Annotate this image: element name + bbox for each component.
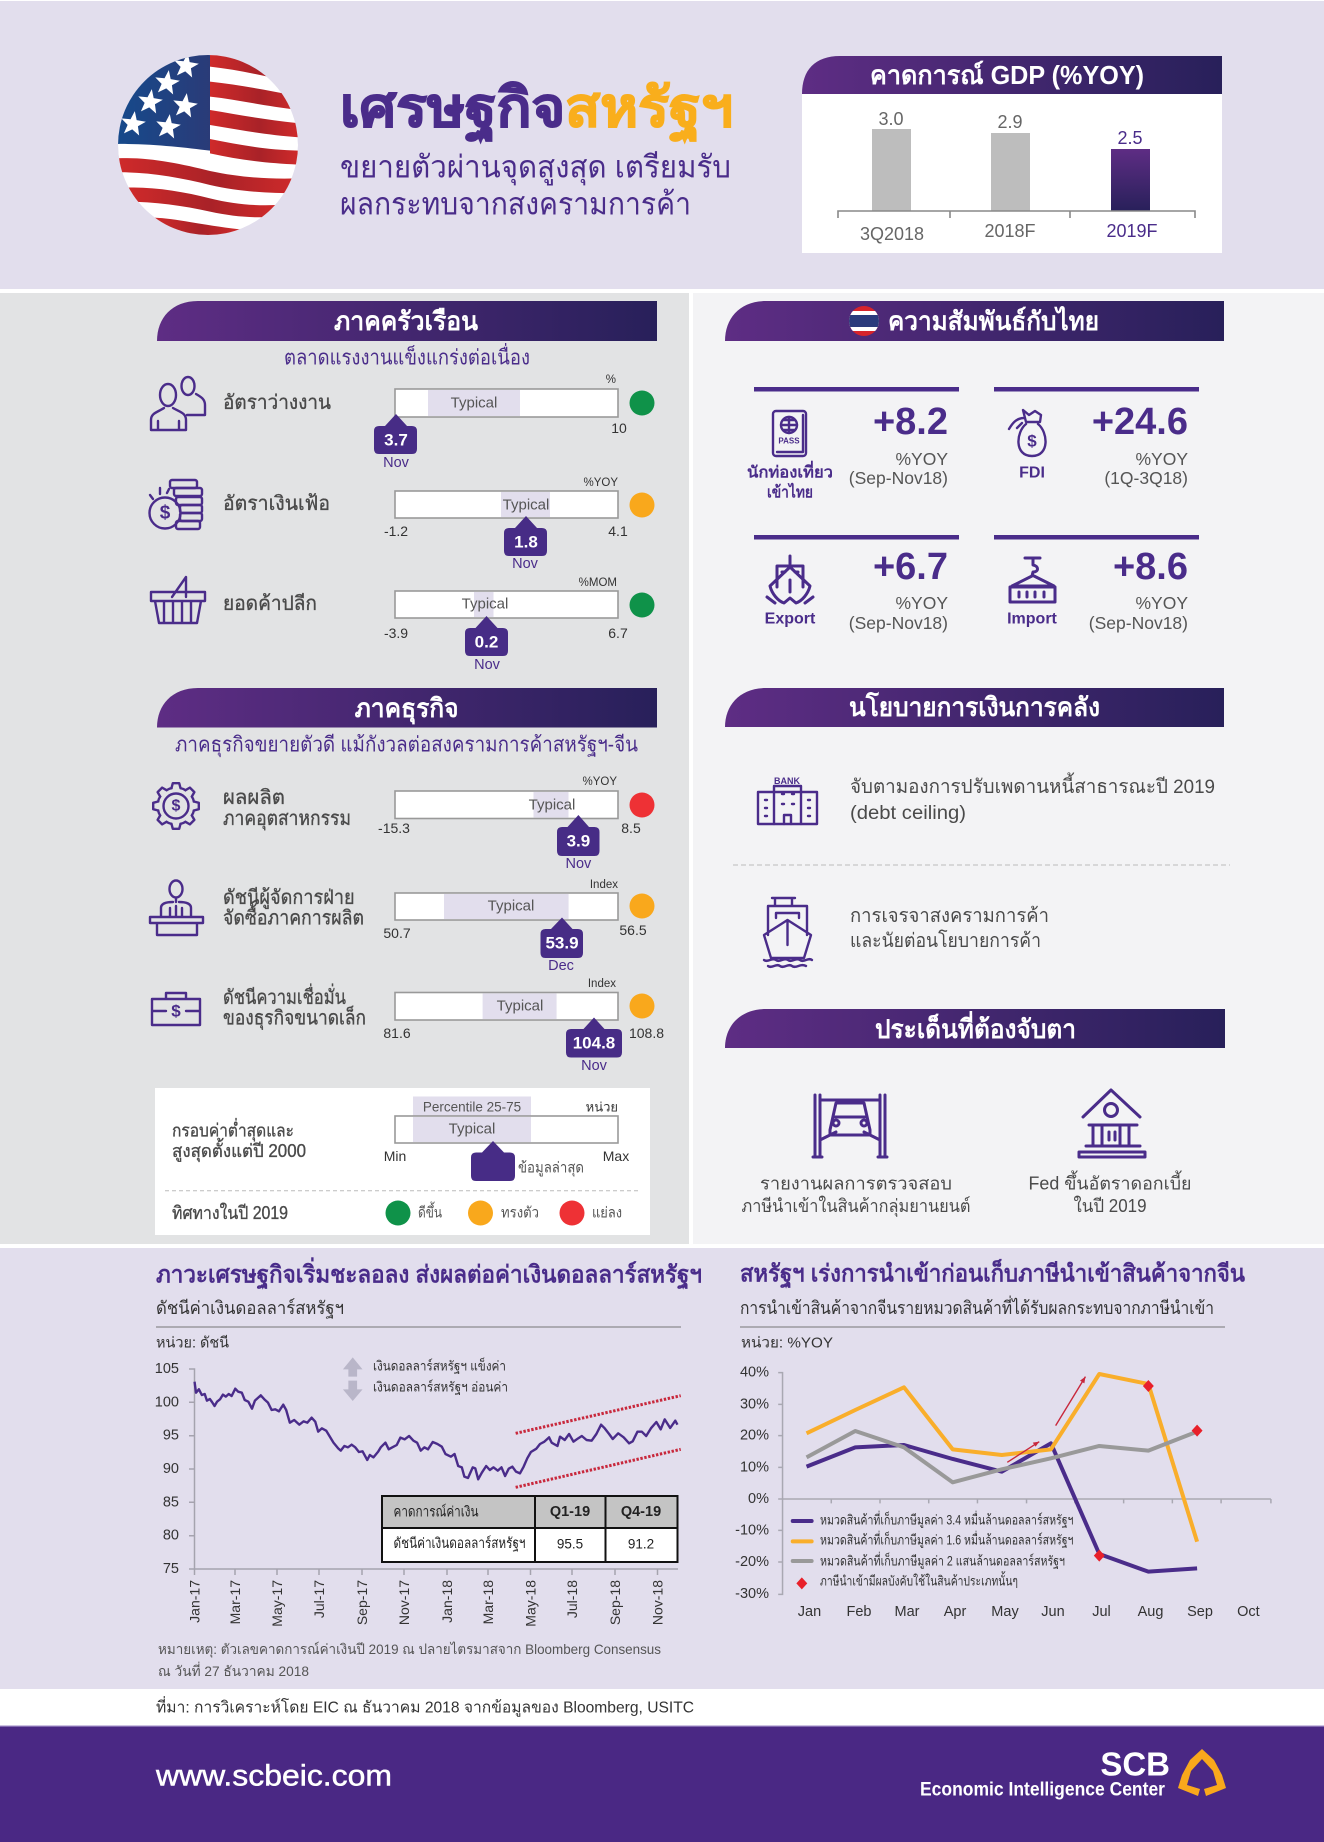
label: industrial production: ภาคอุตสาหกรรม — [223, 808, 351, 831]
icon text: briefcase dollar: $ — [171, 1002, 181, 1020]
table: currency forecast — [382, 1496, 678, 1562]
subtitle: ขยายตัวผ่านจุดสูงสุด เตรียมรับ — [340, 150, 731, 186]
line chart: dollar index: 95 — [163, 1428, 179, 1444]
line chart: dollar index: 100 — [155, 1394, 179, 1410]
bar chart: GDP: 2.9 — [997, 112, 1023, 132]
line chart: dollar index: May-17 — [269, 1580, 285, 1627]
table: currency forecast: Q4-19 — [621, 1504, 661, 1520]
line chart: dollar index: Nov-18 — [650, 1580, 666, 1625]
line chart: imports: Mar — [895, 1604, 920, 1620]
line chart: imports: หมวดสินค้าที่เก็บภาษีมูลค่า 1.6 หมื่นล้านดอลลาร์สหรัฐฯ — [820, 1530, 1074, 1548]
line chart: imports: หมวดสินค้าที่เก็บภาษีมูลค่า 2 แสนล้านดอลลาร์สหรัฐฯ — [820, 1552, 1065, 1570]
line chart: imports: 0% — [748, 1491, 769, 1507]
table: currency forecast: คาดการณ์ค่าเงิน — [394, 1504, 479, 1520]
line chart: dollar index: May-18 — [522, 1580, 538, 1627]
footer — [0, 1726, 1324, 1842]
line chart: imports — [735, 1327, 1271, 1620]
subtitle — [340, 150, 731, 222]
gauge: inflation: 4.1 — [608, 523, 628, 539]
icon: people — [151, 377, 205, 430]
line chart: imports: Aug — [1138, 1604, 1163, 1620]
gauge: PMI: 56.5 — [619, 922, 647, 938]
stat card: tourists — [747, 387, 959, 502]
stat card: FDI — [994, 387, 1199, 488]
item: trade war — [764, 898, 1049, 967]
logo: SCB: Economic Intelligence Center — [920, 1780, 1166, 1800]
gauge: PMI: 53.9 — [545, 934, 579, 952]
legend gauge: Percentile 25-75 — [423, 1100, 521, 1114]
line chart: dollar index: Jul-18 — [564, 1580, 580, 1618]
stat card: import: +8.6 — [1113, 546, 1188, 588]
legend gauge: Max — [603, 1148, 629, 1164]
gauge: retail: Nov — [474, 657, 501, 673]
icon: gear — [153, 783, 199, 829]
gauge: PMI — [383, 879, 654, 974]
line chart: dollar index: Mar-17 — [227, 1580, 243, 1624]
stat card: FDI: (1Q-3Q18) — [1104, 468, 1188, 488]
gauge: small business confidence: 104.8 — [573, 1034, 615, 1052]
stat card: export: %YOY — [895, 593, 948, 613]
gauge: small business confidence: 108.8 — [629, 1025, 664, 1041]
line chart: dollar index: Sep-17 — [354, 1580, 370, 1625]
chart title: dollar index: ภาวะเศรษฐกิจเริ่มชะลอลง ส่งผลต่อค่าเงินดอลลาร์สหรัฐฯ — [156, 1256, 702, 1290]
gauge: unemployment: % — [606, 374, 616, 386]
subheading: household: ตลาดแรงงานแข็งแกร่งต่อเนื่อง — [284, 342, 530, 370]
gauge: small business confidence: Nov — [581, 1058, 608, 1074]
gauge: retail: -3.9 — [384, 625, 408, 641]
heading: household: ภาคครัวเรือน — [334, 306, 478, 336]
legend text: range — [172, 1118, 306, 1162]
item: debt ceiling: (debt ceiling) — [850, 802, 966, 824]
item: Fed rate — [1028, 1090, 1192, 1216]
stat card: FDI: %YOY — [1135, 449, 1188, 469]
gauge: inflation — [384, 477, 654, 572]
label: unemployment: อัตราว่างงาน — [223, 392, 331, 414]
icon: basket — [151, 577, 205, 623]
legend: stable — [468, 1200, 539, 1226]
item: Fed rate: Fed ขึ้นอัตราดอกเบี้ย — [1028, 1170, 1192, 1194]
heading: issues to watch: ประเด็นที่ต้องจับตา — [875, 1010, 1076, 1044]
table: currency forecast: 95.5 — [557, 1536, 583, 1552]
legend gauge: หน่วย — [586, 1100, 618, 1114]
gauge: industrial production: %YOY — [582, 776, 617, 788]
legend gauge: ข้อมูลล่าสุด — [518, 1160, 584, 1178]
legend: better: ดีขึ้น — [418, 1202, 442, 1222]
legend: stable: ทรงตัว — [501, 1204, 539, 1222]
label: inflation: อัตราเงินเฟ้อ — [223, 493, 330, 515]
title: เศรษฐกิจ สหรัฐฯ — [340, 78, 733, 143]
heading: business: ภาคธุรกิจ — [355, 693, 459, 725]
subtitle: ผลกระทบจากสงครามการค้า — [340, 186, 691, 222]
gauge: PMI: Dec — [548, 958, 574, 974]
heading: fiscal policy — [725, 688, 1224, 727]
line chart: imports: 10% — [740, 1459, 769, 1475]
line chart: dollar index: Sep-18 — [607, 1580, 623, 1625]
label: small business confidence — [223, 983, 366, 1030]
gauge: small business confidence — [383, 978, 664, 1074]
bar chart: GDP: 2.5 — [1117, 128, 1143, 148]
gauge: unemployment — [374, 374, 654, 471]
gauge: retail: %MOM — [579, 577, 617, 589]
stat card: export: (Sep-Nov18) — [849, 613, 948, 633]
stat card: import: %YOY — [1135, 593, 1188, 613]
gauge: industrial production: Typical — [529, 796, 575, 814]
gauge: industrial production: 8.5 — [621, 820, 641, 836]
legend text: direction: ทิศทางในปี 2019 — [172, 1202, 288, 1223]
line chart: imports: -30% — [735, 1586, 769, 1602]
icon: briefcase — [152, 993, 200, 1025]
note: หมายเหตุ: ตัวเลขคาดการณ์ค่าเงินปี 2019 ณ ปลายไตรมาสจาก Bloomberg Consensus — [158, 1641, 661, 1658]
line chart: imports: หมวดสินค้าที่เก็บภาษีมูลค่า 3.4 หมื่นล้านดอลลาร์สหรัฐฯ — [820, 1510, 1074, 1528]
heading: household — [157, 301, 657, 341]
line chart: imports: 40% — [740, 1365, 769, 1381]
line chart: imports: Sep — [1187, 1604, 1213, 1620]
heading: GDP forecast: คาดการณ์ GDP (%YOY) — [870, 60, 1144, 90]
website: www.scbeic.com — [155, 1760, 392, 1792]
line chart: dollar index: 105 — [155, 1361, 179, 1377]
stat card: FDI: $ — [1027, 432, 1037, 450]
stat card: export: +6.7 — [873, 546, 948, 588]
legend: worse: แย่ลง — [592, 1204, 622, 1222]
item: debt ceiling: BANK — [774, 776, 800, 786]
panel: Thailand links — [725, 301, 1224, 633]
line chart: dollar index: Nov-17 — [396, 1580, 412, 1625]
gauge: unemployment: Typical — [451, 394, 497, 412]
chart subtitle: dollar index: ดัชนีค่าเงินดอลลาร์สหรัฐฯ — [156, 1298, 344, 1319]
label: small business confidence: ดัชนีความเชื่อมั่น — [223, 983, 346, 1009]
gauge: inflation: -1.2 — [384, 523, 408, 539]
label: industrial production: ผลผลิต — [223, 787, 285, 809]
gauge: unemployment: Nov — [383, 455, 410, 471]
line chart: dollar index: 90 — [163, 1461, 179, 1477]
gauge: industrial production: 3.9 — [567, 832, 590, 850]
gauge: PMI: Index — [590, 879, 618, 891]
gauge: small business confidence: Index — [588, 978, 616, 990]
label: retail: ยอดค้าปลีก — [223, 593, 317, 615]
chart subtitle: imports: การนำเข้าสินค้าจากจีนรายหมวดสินค้าที่ได้รับผลกระทบจากภาษีนำเข้า — [740, 1295, 1214, 1318]
bar chart: GDP: 3.0 — [878, 109, 904, 129]
line chart: dollar index — [155, 1327, 681, 1627]
line chart: imports: Jul — [1092, 1604, 1111, 1620]
panel: GDP forecast — [802, 56, 1222, 253]
bar chart: GDP: 2019F — [1106, 221, 1158, 241]
item: debt ceiling: จับตามองการปรับเพดานหนี้สาธารณะปี 2019 — [850, 772, 1215, 798]
line chart: dollar index: 85 — [163, 1494, 179, 1510]
stat card: tourists: เข้าไทย — [767, 482, 813, 502]
icon text: dollar: $ — [160, 502, 171, 524]
stat card: tourists: (Sep-Nov18) — [849, 468, 948, 488]
line chart: imports: Jun — [1041, 1604, 1065, 1620]
chart title: imports: สหรัฐฯ เร่งการนำเข้าก่อนเก็บภาษีนำเข้าสินค้าจากจีน — [740, 1258, 1246, 1290]
line chart: imports: Oct — [1237, 1604, 1260, 1620]
gauge: retail: Typical — [462, 596, 508, 612]
legend gauge: Min — [384, 1148, 406, 1164]
unit: imports: หน่วย: %YOY — [741, 1334, 833, 1352]
chart panel: imports from China — [735, 1258, 1271, 1620]
heading: business — [157, 688, 657, 728]
stat card: tourists: PASS — [778, 436, 800, 446]
label: PMI: ดัชนีผู้จัดการฝ่าย — [223, 887, 355, 910]
panel: business sector — [150, 688, 664, 1074]
stat card: tourists: %YOY — [895, 449, 948, 469]
item: trade war: และนัยต่อนโยบายการค้า — [850, 929, 1041, 952]
line chart: dollar index: Mar-18 — [480, 1580, 496, 1624]
panel: legend — [155, 1088, 650, 1235]
legend gauge — [384, 1096, 629, 1181]
line chart: imports: -10% — [735, 1522, 769, 1538]
heading: GDP forecast — [802, 56, 1222, 94]
line chart: dollar index: Jan-18 — [439, 1580, 455, 1623]
panel: household sector — [150, 301, 657, 673]
label: PMI: จัดซื้อภาคการผลิต — [223, 904, 364, 930]
heading: Thailand links: ความสัมพันธ์กับไทย — [888, 305, 1099, 336]
line chart: dollar index: Jul-17 — [311, 1580, 327, 1618]
gauge: inflation: Nov — [512, 556, 539, 572]
gauge: inflation: 1.8 — [514, 532, 538, 552]
gauge: retail — [384, 577, 654, 673]
icon: podium speaker — [150, 880, 203, 935]
gauge: small business confidence: Typical — [497, 998, 543, 1014]
logo: SCB: SCB — [1100, 1746, 1170, 1782]
gauge: retail: 6.7 — [608, 625, 628, 641]
line chart: imports: 20% — [740, 1428, 769, 1444]
item: auto tariff: รายงานผลการตรวจสอบ — [760, 1174, 952, 1194]
bar chart: GDP: 2018F — [984, 221, 1036, 241]
panel: issues to watch — [725, 1009, 1225, 1217]
gauge: industrial production: -15.3 — [378, 820, 410, 836]
stat card: FDI: +24.6 — [1092, 401, 1188, 443]
stat card: FDI: FDI — [1019, 464, 1045, 482]
line chart: imports: Feb — [846, 1604, 872, 1620]
note — [158, 1641, 661, 1679]
logo: SCB — [920, 1746, 1226, 1800]
line chart: dollar index: 75 — [163, 1561, 179, 1577]
item: trade war: การเจรจาสงครามการค้า — [850, 905, 1049, 927]
stat card: tourists: +8.2 — [873, 401, 948, 443]
heading: Thailand links — [725, 301, 1224, 341]
subheading: business: ภาคธุรกิจขยายตัวดี แม้กังวลต่อสงครามการค้าสหรัฐฯ-จีน — [175, 734, 638, 758]
note: ณ วันที่ 27 ธันวาคม 2018 — [158, 1662, 309, 1679]
line chart: imports: ภาษีนำเข้ามีผลบังคับใช้ในสินค้าประเภทนั้นๆ — [820, 1570, 1018, 1588]
gauge: PMI: 50.7 — [383, 925, 411, 941]
gauge: retail: 0.2 — [475, 632, 498, 652]
line chart: dollar index: เงินดอลลาร์สหรัฐฯ อ่อนค่า — [373, 1378, 508, 1396]
bar chart: GDP — [838, 109, 1195, 244]
item: debt ceiling — [758, 772, 1215, 824]
label: PMI — [223, 887, 364, 930]
gauge: unemployment: 3.7 — [384, 430, 408, 450]
gauge: inflation: %YOY — [583, 477, 618, 489]
gauge: industrial production — [378, 776, 654, 872]
stat card: export: Export — [765, 610, 816, 628]
heading: fiscal policy: นโยบายการเงินการคลัง — [849, 691, 1100, 722]
legend text: range: กรอบค่าต่ำสุดและ — [172, 1118, 294, 1142]
stat card: import: (Sep-Nov18) — [1089, 613, 1188, 633]
line chart: imports: 30% — [740, 1396, 769, 1412]
table: currency forecast: Q1-19 — [550, 1504, 590, 1520]
heading: issues to watch — [725, 1009, 1225, 1048]
gauge: PMI: Typical — [488, 898, 534, 914]
gauge: inflation: Typical — [503, 496, 549, 514]
item: auto tariff: ภาษีนำเข้าในสินค้ากลุ่มยานยนต์ — [742, 1195, 970, 1217]
chart panel: dollar index — [155, 1256, 702, 1679]
gauge: small business confidence: 81.6 — [383, 1025, 411, 1041]
table: currency forecast: ดัชนีค่าเงินดอลลาร์สหรัฐฯ — [394, 1535, 526, 1552]
item: auto tariff — [742, 1095, 970, 1217]
bar chart: GDP: 3Q2018 — [860, 224, 924, 244]
legend: worse — [560, 1200, 622, 1226]
icon: US flag — [118, 55, 298, 235]
source: ที่มา: การวิเคราะห์โดย EIC ณ ธันวาคม 2018 จากข้อมูลของ Bloomberg, USITC — [156, 1696, 694, 1718]
stat card: tourists: นักท่องเที่ยว — [747, 460, 833, 482]
line chart: dollar index: เงินดอลลาร์สหรัฐฯ แข็งค่า — [373, 1356, 506, 1374]
legend text: range: สูงสุดตั้งแต่ปี 2000 — [172, 1138, 306, 1162]
line chart: imports: -20% — [735, 1554, 769, 1570]
line chart: dollar index: Jan-17 — [186, 1580, 202, 1623]
stat card: import — [994, 535, 1199, 633]
table: currency forecast: 91.2 — [628, 1536, 654, 1552]
gauge: unemployment: 10 — [611, 420, 627, 436]
item: Fed rate: ในปี 2019 — [1074, 1195, 1146, 1216]
line chart: imports: May — [991, 1604, 1019, 1620]
label: small business confidence: ของธุรกิจขนาดเล็ก — [223, 1004, 366, 1030]
line chart: imports: Apr — [944, 1604, 966, 1620]
line chart: dollar index: 80 — [163, 1528, 179, 1544]
gauge: industrial production: Nov — [566, 856, 592, 872]
unit: dollar index: หน่วย: ดัชนี — [156, 1334, 229, 1352]
line chart: imports: Jan — [798, 1604, 821, 1620]
stat card: import: Import — [1007, 610, 1058, 628]
stat card: export — [754, 535, 959, 633]
label: industrial production — [223, 787, 351, 831]
legend: better — [386, 1200, 442, 1226]
icon: coins — [150, 480, 202, 529]
panel: fiscal policy — [725, 688, 1224, 967]
legend gauge: Typical — [449, 1120, 495, 1138]
icon text: gear dollar: $ — [172, 798, 181, 814]
